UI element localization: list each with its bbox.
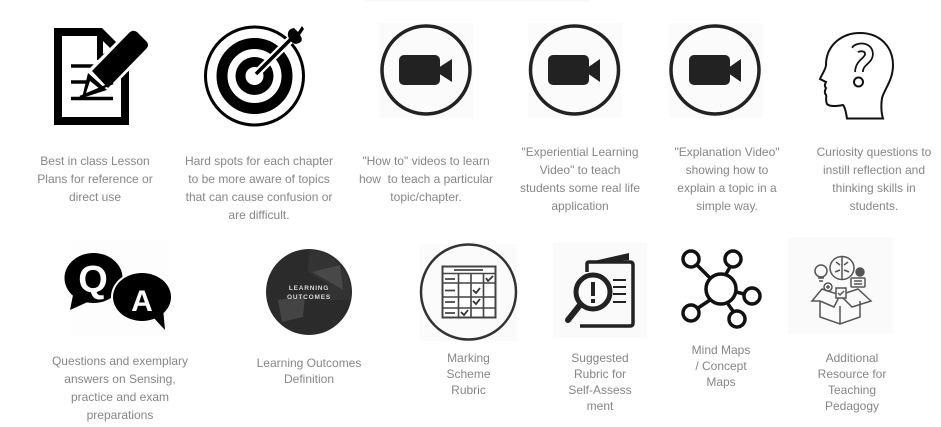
- text: explanation video: [674, 145, 780, 213]
- text: marking scheme: Scheme: [446, 367, 491, 381]
- text: hard spots: that can cause confusion or: [186, 190, 332, 204]
- text: curiosity questions: students.: [850, 199, 898, 213]
- text: experiential learning video: [520, 145, 640, 213]
- text: how to videos: how to teach a particular: [359, 172, 493, 186]
- letter A: A: [131, 285, 153, 318]
- text: marking scheme: Rubric: [451, 383, 486, 397]
- text: experiential learning video: application: [551, 199, 609, 213]
- text: questions and answers: Questions and exemplary: [52, 354, 188, 368]
- text: additional resource: [818, 351, 886, 413]
- letter Q: Q: [78, 259, 108, 301]
- badge label: LEARNING: [289, 285, 329, 292]
- icon: magnifier over rubric booklet: [553, 243, 647, 338]
- icon: target with arrow: [206, 26, 304, 125]
- text: questions and answers: answers on Sensing,: [64, 372, 176, 386]
- text: explanation video: "Explanation Video": [674, 145, 780, 159]
- text: experiential learning video: students some real life: [520, 181, 640, 195]
- text: mind maps: Mind Maps: [692, 343, 750, 357]
- text: curiosity questions: instill reflection and: [823, 163, 925, 177]
- icon: mind map network: [683, 251, 760, 327]
- text: curiosity questions: thinking skills in: [832, 181, 916, 195]
- text: learning outcomes: Learning Outcomes: [257, 356, 361, 370]
- text: additional resource: Pedagogy: [825, 399, 879, 413]
- text: questions and answers: practice and exam: [71, 390, 169, 404]
- text: explanation video: showing how to: [686, 163, 768, 177]
- text: learning outcomes: [257, 356, 361, 386]
- text: marking scheme: Marking: [447, 351, 490, 365]
- text: experiential learning video: "Experiential Learning: [522, 145, 638, 159]
- icon: marking scheme table: [420, 244, 517, 341]
- text: suggested rubric: [568, 351, 632, 413]
- text: questions and answers: [52, 354, 188, 422]
- text: mind maps: [692, 343, 750, 389]
- text: questions and answers: preparations: [87, 408, 153, 422]
- text: hard spots: are difficult.: [228, 208, 290, 222]
- text: lesson plans: [37, 154, 153, 204]
- text: explanation video: explain a topic in a: [677, 181, 777, 195]
- text: additional resource: Additional: [826, 351, 878, 365]
- text: how to videos: [359, 154, 493, 204]
- text: lesson plans: Best in class Lesson: [40, 154, 150, 168]
- text: how to videos: topic/chapter.: [390, 190, 462, 204]
- text: suggested rubric: Suggested: [571, 351, 629, 365]
- text: suggested rubric: ment: [587, 399, 613, 413]
- icon: question and answer bubbles: [64, 239, 173, 336]
- text: curiosity questions: Curiosity questions to: [817, 145, 931, 159]
- icon: experiential video: [528, 23, 622, 118]
- text: additional resource: Resource for: [818, 367, 886, 381]
- text: additional resource: Teaching: [828, 383, 876, 397]
- icon: learning outcomes badge: [266, 249, 352, 335]
- icon: lesson plan document with pencil: [54, 26, 153, 125]
- text: hard spots: to be more aware of topics: [188, 172, 330, 186]
- icon: head with question mark: [820, 33, 893, 118]
- icon: how-to video: [379, 23, 473, 118]
- text: lesson plans: direct use: [69, 190, 121, 204]
- icon: explanation video: [669, 23, 763, 118]
- text: curiosity questions: [817, 145, 931, 213]
- text: experiential learning video: Video" to teach: [540, 163, 620, 177]
- text: lesson plans: Plans for reference or: [37, 172, 153, 186]
- text: learning outcomes: Definition: [284, 372, 334, 386]
- icon: resource box with ideas: [788, 237, 893, 333]
- text: hard spots: Hard spots for each chapter: [185, 154, 333, 168]
- text: suggested rubric: Rubric for: [574, 367, 626, 381]
- text: explanation video: simple way.: [696, 199, 758, 213]
- text: marking scheme: [446, 351, 491, 397]
- badge label line 2: OUTCOMES: [287, 294, 331, 301]
- text: suggested rubric: Self-Assess: [568, 383, 632, 397]
- text: mind maps: Maps: [706, 375, 736, 389]
- text: hard spots: [185, 154, 333, 222]
- text: how to videos: "How to" videos to learn: [362, 154, 490, 168]
- text: mind maps: / Concept: [695, 359, 747, 373]
